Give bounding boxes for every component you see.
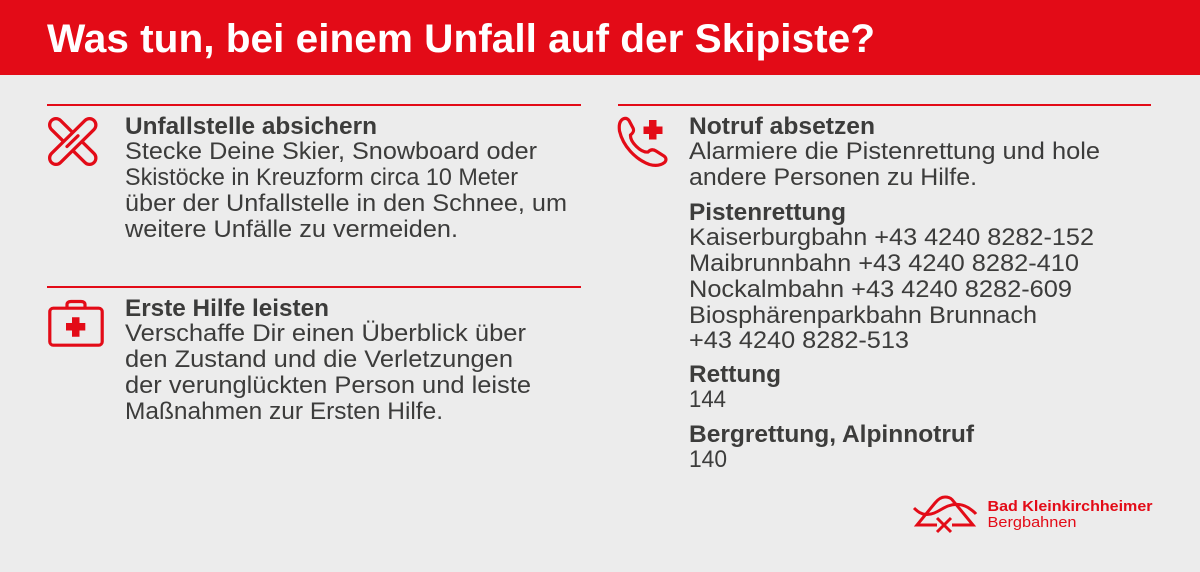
text block: Bergrettung, Alpinnotruf: Bergrettung, Alpinnotruf (689, 421, 975, 448)
text block: Bergrettung, Alpinnotruf (689, 421, 975, 473)
title: Was tun, bei einem Unfall auf der Skipiste? (47, 17, 875, 61)
icon: crossed skis (56, 125, 90, 158)
logo text: Bad Kleinkirchheimer (988, 498, 1153, 515)
text block: Erste Hilfe leisten: Maßnahmen zur Ersten Hilfe. (125, 398, 443, 425)
text block: Pistenrettung: +43 4240 8282-513 (689, 327, 909, 354)
text block: Unfallstelle absichern: weitere Unfälle zu vermeiden. (124, 216, 458, 243)
text block: Pistenrettung: Pistenrettung (689, 199, 846, 226)
logo mark (914, 497, 976, 532)
text block: Rettung: Rettung (689, 361, 781, 388)
text block: Erste Hilfe leisten: den Zustand und die Verletzungen (125, 346, 513, 373)
text block: Pistenrettung: Kaiserburgbahn +43 4240 8282-152 (689, 224, 1094, 251)
text block: Pistenrettung: Biosphärenparkbahn Brunnach (689, 302, 1037, 329)
logo: Bad Kleinkirchheimer Bergbahnen (914, 497, 1153, 532)
text block: Pistenrettung: Maibrunnbahn +43 4240 8282-410 (689, 250, 1079, 277)
text block: Rettung: 144 (689, 386, 726, 413)
text block: Erste Hilfe leisten: Erste Hilfe leisten (125, 295, 329, 322)
text block: Bergrettung, Alpinnotruf: 140 (689, 446, 727, 473)
icon: phone with cross (619, 118, 666, 165)
text block: Erste Hilfe leisten: der verunglückten Person und leiste (125, 372, 531, 399)
text block: Rettung (689, 361, 781, 413)
text block: Notruf absetzen: Notruf absetzen (689, 113, 875, 140)
title banner (0, 0, 1200, 75)
text block: Notruf absetzen: Alarmiere die Pistenrettung und hole (689, 138, 1100, 165)
logo text (988, 498, 1153, 531)
text block: Unfallstelle absichern: Skistöcke in Kreuzform circa 10 Meter (125, 164, 518, 191)
logo text: Bergbahnen (988, 514, 1076, 531)
text block: Unfallstelle absichern (124, 113, 567, 243)
text block: Pistenrettung (689, 199, 1094, 354)
text block: Unfallstelle absichern: Stecke Deine Skier, Snowboard oder (125, 138, 537, 165)
text block: Unfallstelle absichern: Unfallstelle absichern (125, 113, 377, 140)
icon: first aid kit (50, 302, 102, 345)
text block: Pistenrettung: Nockalmbahn +43 4240 8282-609 (689, 276, 1072, 303)
text block: Erste Hilfe leisten (125, 295, 531, 425)
text block: Notruf absetzen (689, 113, 1100, 191)
text block: Erste Hilfe leisten: Verschaffe Dir einen Überblick über (125, 320, 526, 347)
text block: Unfallstelle absichern: über der Unfallstelle in den Schnee, um (125, 190, 567, 217)
text block: Notruf absetzen: andere Personen zu Hilfe. (689, 164, 977, 191)
